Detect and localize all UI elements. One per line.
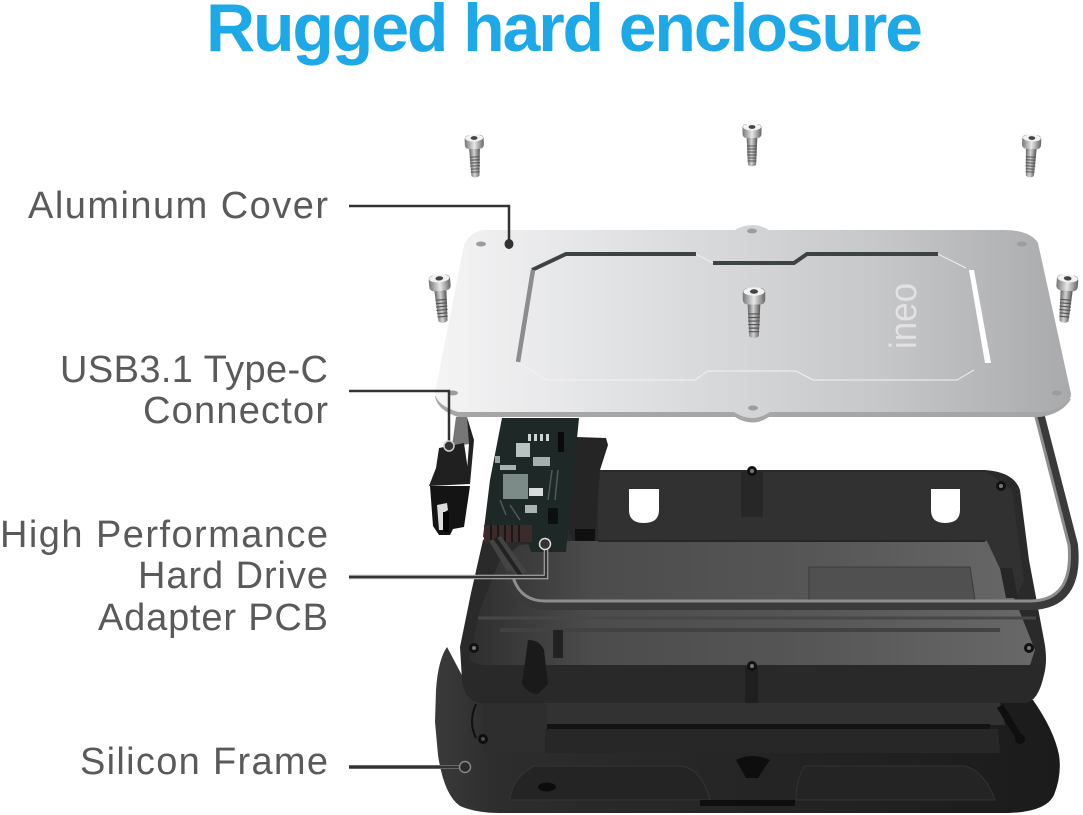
exploded enclosure illustration	[428, 124, 1079, 813]
label: adapter pcb: Adapter PCB	[98, 597, 328, 639]
tray rear wall	[598, 472, 1024, 600]
label: silicon frame: Silicon Frame	[80, 741, 328, 783]
tray front wall	[462, 650, 1044, 703]
label: usb connector: USB3.1 Type-C	[60, 349, 328, 391]
pcb chips	[503, 474, 528, 499]
hard case tray	[460, 466, 1046, 703]
recess areas	[510, 766, 710, 800]
aluminum cover plate	[435, 225, 1071, 422]
label: adapter pcb: Hard Drive	[138, 555, 328, 597]
label: adapter pcb	[0, 514, 550, 639]
screws	[428, 124, 1079, 338]
plate grooves dark	[532, 254, 938, 270]
label: aluminum cover: Aluminum Cover	[28, 185, 328, 227]
silicon frame	[435, 647, 1060, 813]
cable loop	[510, 417, 1074, 605]
logo: ineo	[883, 283, 925, 349]
label: adapter pcb: High Performance	[0, 514, 328, 556]
slots	[629, 489, 659, 523]
header pins	[484, 525, 532, 542]
label: aluminum cover	[28, 185, 514, 249]
plate top surface	[435, 225, 1071, 418]
label: usb connector	[60, 349, 454, 451]
label: silicon frame	[80, 741, 470, 783]
pillars	[741, 472, 763, 517]
plate edge	[435, 396, 1071, 422]
white slit	[969, 270, 991, 363]
plate grooves light	[517, 362, 974, 380]
pcb cable plug	[489, 536, 527, 581]
sata connector	[568, 437, 608, 540]
label: usb connector: Connector	[143, 390, 328, 432]
plate holes	[448, 228, 1062, 410]
pcb board	[483, 418, 608, 581]
tray floor	[468, 541, 1035, 665]
tray port cutout	[522, 640, 548, 694]
usb-c connector	[429, 417, 474, 535]
